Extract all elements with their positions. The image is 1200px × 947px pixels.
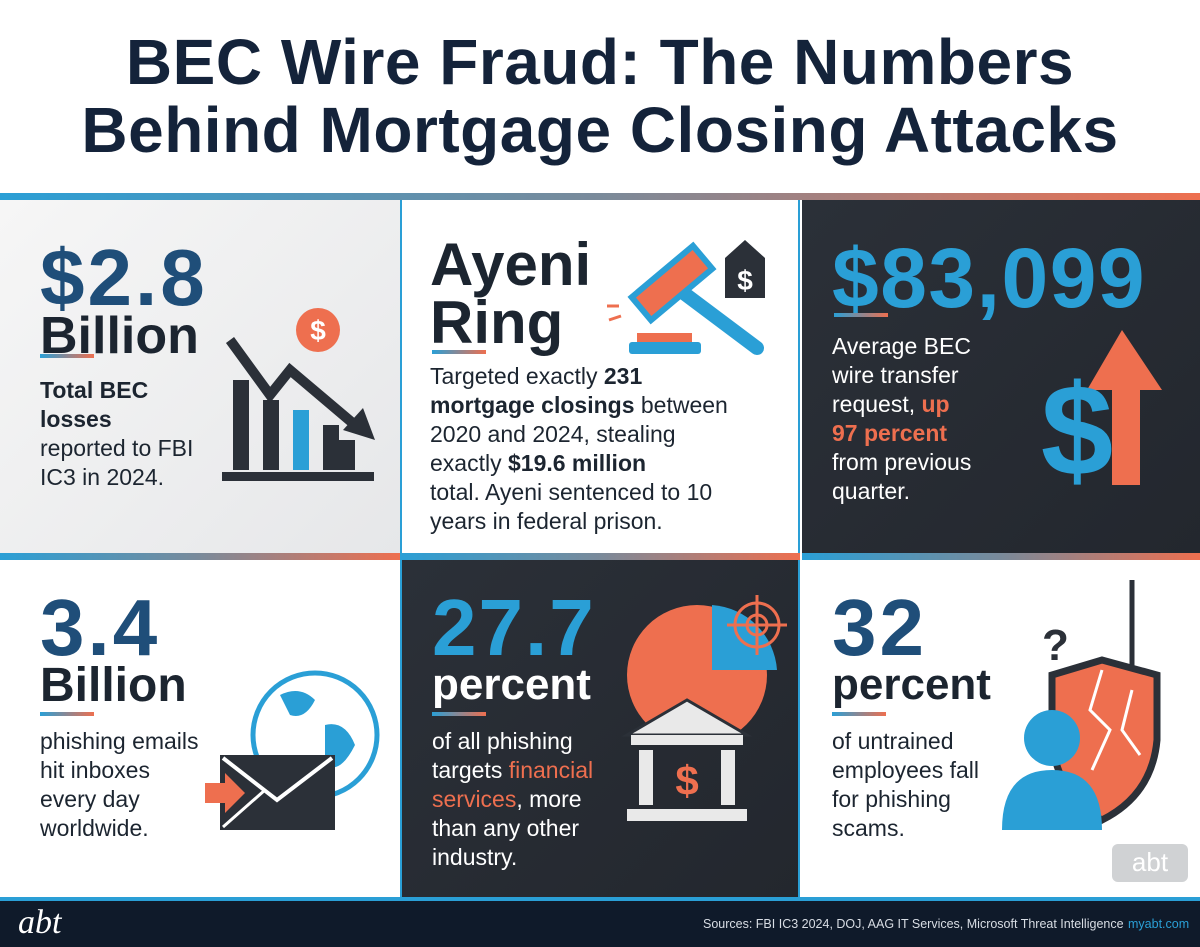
title: [81, 26, 1119, 166]
subheading: Billion: [40, 307, 199, 365]
description: Average BEC: [832, 333, 971, 359]
description: industry.: [432, 844, 517, 870]
description: targets financial: [432, 757, 593, 783]
description: from previous: [832, 449, 971, 475]
subheading: percent: [432, 660, 591, 709]
description: worldwide.: [40, 815, 149, 841]
description: services, more: [432, 786, 582, 812]
description: 2020 and 2024, stealing: [430, 421, 676, 447]
icon: gavel and house: $: [737, 265, 753, 296]
description: Targeted exactly 231: [430, 363, 642, 389]
description: scams.: [832, 815, 905, 841]
sources: Sources: FBI IC3 2024, DOJ, AAG IT Services, Microsoft Threat Intelligence: [703, 917, 1124, 931]
big number: 32: [832, 583, 927, 672]
description: request, up: [832, 391, 950, 417]
watermark logo: abt: [1132, 847, 1168, 877]
big number: $83,099: [832, 231, 1146, 325]
description: 97 percent: [832, 420, 947, 446]
panel: 32 percent: [802, 560, 1200, 897]
description: total. Ayeni sentenced to 10: [430, 479, 712, 505]
description: [432, 728, 593, 870]
big number: 3.4: [40, 583, 160, 672]
footer: [0, 897, 1200, 947]
description: Total BEC: [40, 377, 148, 403]
panel: $2.8 billion: [0, 200, 400, 553]
big number: $2.8: [40, 233, 208, 322]
panel: Ayeni Ring: [400, 200, 800, 553]
description: losses: [40, 406, 112, 432]
description: [832, 728, 979, 841]
big number: 27.7: [432, 583, 596, 672]
icon: pie chart, target, bank: [627, 595, 787, 821]
icon: hook, cracked shield, person: [1002, 580, 1160, 830]
icon: dollar with up arrow: [1041, 330, 1162, 490]
subheading: Billion: [40, 659, 187, 712]
heading: [430, 231, 591, 356]
description: of untrained: [832, 728, 953, 754]
description: of all phishing: [432, 728, 573, 754]
description: for phishing: [832, 786, 951, 812]
panel: 3.4 billion: [0, 560, 400, 897]
description: mortgage closings between: [430, 392, 728, 418]
middle gradient bars: [0, 553, 400, 560]
title: Behind Mortgage Closing Attacks: [81, 94, 1119, 166]
description: exactly $19.6 million: [430, 450, 646, 476]
description: wire transfer: [832, 362, 959, 388]
description: [40, 377, 193, 490]
icon: hook, cracked shield, person: ?: [1042, 621, 1069, 670]
panel: $83,099: [802, 200, 1200, 553]
description: years in federal prison.: [430, 508, 663, 534]
icon: falling bar chart: [222, 308, 375, 481]
panel: 27.7 percent: [400, 560, 800, 897]
description: [40, 728, 199, 841]
icon: gavel and house: [607, 240, 765, 355]
description: phishing emails: [40, 728, 199, 754]
description: [832, 333, 971, 504]
heading: Ayeni: [430, 231, 591, 298]
description: [430, 363, 728, 534]
subheading: percent: [832, 660, 991, 709]
watermark logo: [1112, 844, 1188, 882]
heading: Ring: [430, 289, 563, 356]
website: myabt.com: [1128, 917, 1189, 931]
icon: pie chart, target, bank: $: [675, 757, 699, 804]
description: than any other: [432, 815, 579, 841]
description: IC3 in 2024.: [40, 464, 164, 490]
description: every day: [40, 786, 140, 812]
top gradient bar: [0, 193, 1200, 200]
title: BEC Wire Fraud: The Numbers: [126, 26, 1074, 98]
description: quarter.: [832, 478, 910, 504]
description: employees fall: [832, 757, 979, 783]
icon: globe and envelope: [205, 670, 380, 830]
description: reported to FBI: [40, 435, 193, 461]
footer logo: abt: [18, 904, 61, 941]
icon: falling bar chart: $: [310, 315, 326, 346]
description: hit inboxes: [40, 757, 150, 783]
